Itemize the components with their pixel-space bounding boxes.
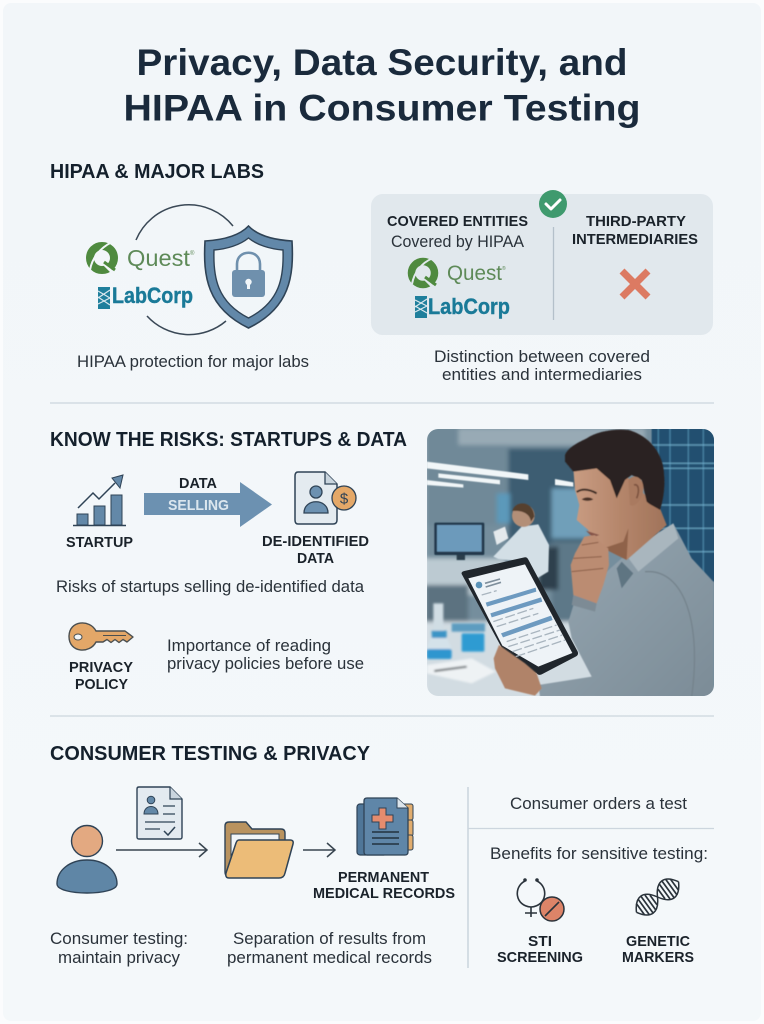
arrow: data selling: DATA (179, 475, 217, 492)
icon: shield with padlock (205, 226, 292, 328)
title: HIPAA in Consumer Testing (124, 86, 640, 128)
comparison card (371, 194, 713, 335)
caption: reading policies: Importance of reading (167, 636, 331, 655)
icon: folder (225, 822, 293, 878)
heading: HIPAA and major labs: HIPAA & MAJOR LABS (50, 160, 264, 183)
icon: consumer person (57, 826, 117, 893)
heading: consumer testing and privacy: CONSUMER TESTING & PRIVACY (50, 742, 370, 765)
icon: permanent medical records (357, 798, 413, 855)
label: privacy policy: PRIVACY (69, 659, 133, 676)
label: de-identified data (262, 533, 369, 567)
caption: separation of results (227, 929, 432, 967)
panel: consumer testing flow (50, 787, 455, 967)
label: STI screening (497, 933, 583, 966)
caption: distinction (434, 347, 650, 384)
arrow: to records (303, 843, 335, 857)
icon: green check (539, 190, 567, 218)
flasks on table (427, 603, 496, 683)
man: shirt (538, 523, 713, 697)
man: head (565, 430, 667, 560)
label: genetic markers: MARKERS (622, 949, 694, 966)
monitor and background scientist (434, 503, 549, 582)
panel: privacy policy (69, 623, 364, 693)
icon: startup growth chart (73, 475, 126, 526)
text: consumer orders a test: Consumer orders a test (510, 794, 687, 813)
protective arcs (136, 205, 233, 335)
column: covered entities: LabCorp (428, 294, 510, 319)
icon: de-identified data document (295, 472, 356, 524)
icon: test result document (137, 787, 182, 839)
label: permanent medical records: PERMANENT (338, 869, 429, 886)
label: startup: STARTUP (66, 534, 133, 551)
text: benefits for sensitive testing: Benefits for sensitive testing: (490, 844, 708, 863)
column: covered entities: COVERED ENTITIES (387, 213, 528, 230)
man: hair (565, 430, 664, 510)
man: ear (629, 476, 644, 493)
label: STI screening: STI (528, 933, 552, 950)
icon: de-identified data document: $ (340, 490, 349, 508)
logo: Quest (90, 242, 195, 273)
column: covered entities: Covered by HIPAA (391, 232, 525, 251)
label: STI screening: SCREENING (497, 949, 583, 966)
label: privacy policy (69, 659, 133, 693)
logo: Quest: Quest (127, 245, 191, 271)
arrow: data selling (144, 475, 272, 527)
ceiling lights (427, 462, 573, 488)
tablet (462, 557, 578, 675)
column: covered entities: Quest (447, 262, 502, 285)
icon: DNA helix (630, 873, 685, 921)
man: neck and face (573, 467, 667, 560)
column: third-party intermediaries: THIRD-PARTY (586, 213, 686, 230)
panel: HIPAA protection for major labs (77, 205, 309, 371)
column divider (552, 227, 554, 320)
caption: HIPAA protection: HIPAA protection for major labs (77, 352, 309, 371)
heading: know the risks: KNOW THE RISKS: STARTUPS & DATA (50, 428, 407, 451)
man: facial features (577, 490, 597, 493)
label: permanent medical records (313, 869, 455, 902)
logo: LabCorp: LabCorp (112, 283, 193, 308)
icon: key (69, 623, 133, 650)
arrow: to folder (116, 843, 207, 857)
title: Privacy, Data Security, and (136, 41, 628, 83)
arrow: data selling: SELLING (168, 497, 229, 514)
column: covered entities: ® (502, 265, 506, 272)
panel: sensitive testing benefits (490, 794, 708, 966)
caption: separation of results: Separation of results from (233, 929, 426, 948)
caption: distinction: Distinction between covered (434, 347, 650, 366)
caption: consumer testing: maintain privacy (58, 948, 180, 967)
caption: consumer testing: Consumer testing: (50, 929, 188, 948)
label: de-identified data: DE-IDENTIFIED (262, 533, 369, 550)
column: covered entities (387, 213, 528, 319)
label: genetic markers (622, 933, 694, 966)
panel: startup data selling flow (56, 472, 369, 596)
label: permanent medical records: MEDICAL RECORDS (313, 885, 455, 902)
icon: STI screening (517, 878, 564, 921)
caption: separation of results: permanent medical records (227, 948, 432, 967)
caption: consumer testing (50, 929, 188, 967)
caption: distinction: entities and intermediaries (442, 365, 642, 384)
caption: reading policies: privacy policies before use (167, 654, 364, 673)
panel: covered entities vs intermediaries (371, 190, 713, 384)
man: hand holding tablet (494, 645, 542, 696)
column: third-party intermediaries (572, 213, 698, 297)
caption: risks: Risks of startups selling de-identified data (56, 577, 365, 596)
data wall (652, 428, 718, 582)
logo: Quest: ® (190, 250, 195, 257)
photo background (425, 425, 720, 700)
label: genetic markers: GENETIC (626, 933, 690, 950)
label: de-identified data: DATA (297, 550, 334, 567)
man: hand on chin (571, 535, 609, 612)
caption: reading policies (167, 636, 364, 673)
column: third-party intermediaries: INTERMEDIARIES (572, 231, 698, 248)
label: privacy policy: POLICY (75, 676, 128, 693)
photo: man reviewing report on tablet in lab (425, 425, 720, 700)
title (124, 41, 640, 128)
